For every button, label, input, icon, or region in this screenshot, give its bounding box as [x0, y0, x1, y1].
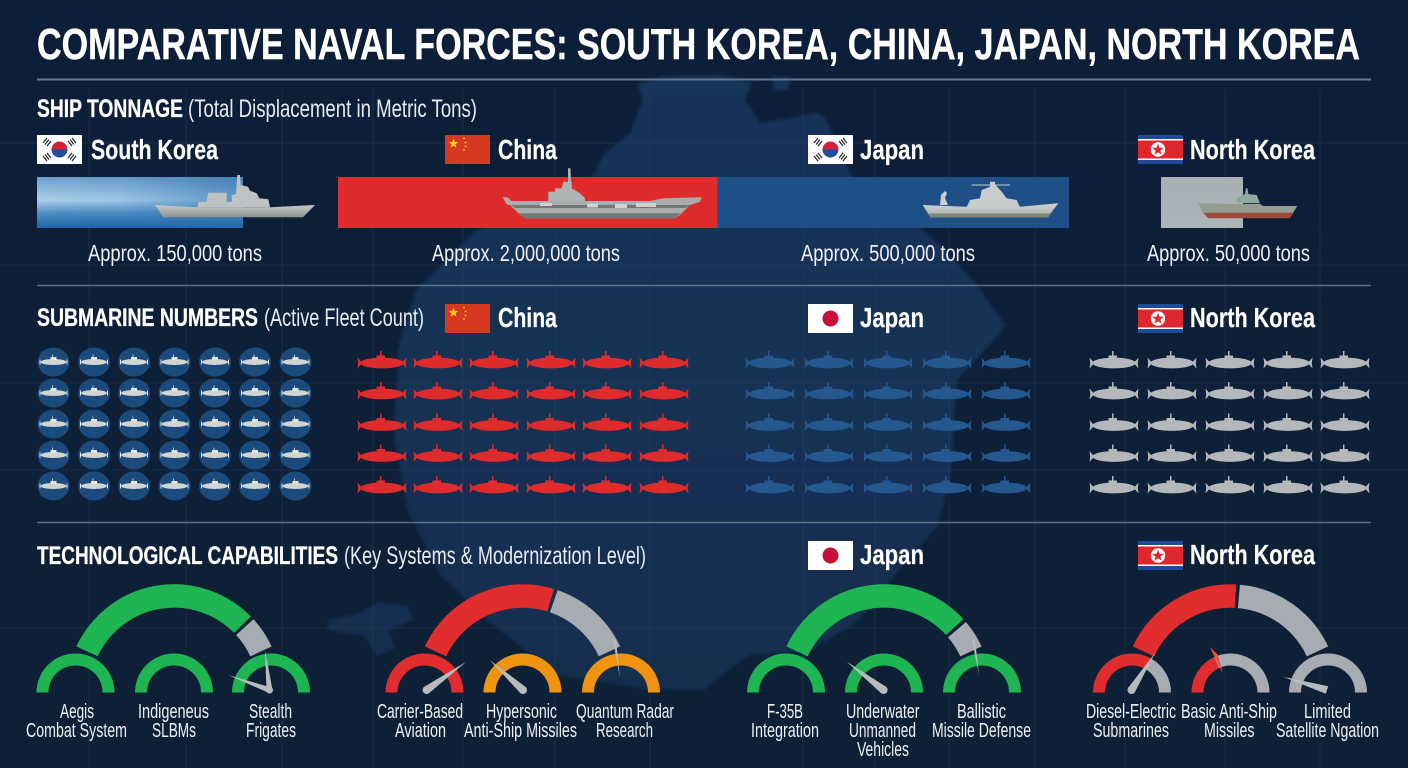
Japan label with flag: Japan: [860, 302, 924, 333]
gauge labels: South Korea: Combat System: [26, 720, 127, 742]
icon: Chinese aircraft carrier: [503, 168, 702, 218]
gauge: stealth frigates: [238, 660, 304, 692]
panel: technological capabilities: [26, 539, 1379, 761]
South Korea tonnage value: Approx. 150,000 tons: [88, 240, 262, 266]
gauge labels: North Korea: Missiles: [1204, 720, 1254, 742]
Japan label with flag: Japan: [860, 134, 924, 165]
gauge: missile defense: [949, 660, 1015, 692]
gauge labels: China: Research: [596, 720, 653, 742]
overall gauge: [797, 596, 971, 651]
Japan label with flag: [808, 134, 924, 165]
North Korea label with flag: [1138, 134, 1315, 165]
gauges: South Korea: [42, 596, 304, 694]
gauge labels: China: Hypersonic: [486, 701, 557, 723]
gauge labels: North Korea: Diesel-Electric: [1086, 701, 1176, 723]
gauge: carrier aviation: [392, 660, 458, 692]
icon: North Korean patrol ship: [1198, 188, 1297, 218]
gauge labels: China: Quantum Radar: [576, 701, 674, 723]
heading: submarine numbers: (Active Fleet Count): [264, 304, 424, 332]
gauge labels: Japan: Integration: [751, 720, 819, 742]
gauge labels: South Korea: Aegis: [60, 701, 94, 723]
South Korea label with flag: [37, 134, 218, 165]
North Korea submarine icons: [1090, 351, 1370, 494]
gauge: basic anti-ship missiles: [1198, 660, 1264, 692]
heading: ship tonnage: (Total Displacement in Metric Tons): [188, 95, 477, 123]
bar: China tonnage: [338, 177, 718, 228]
gauge: hypersonic missiles: [490, 660, 556, 692]
North Korea label with flag: [1138, 302, 1315, 333]
China label with flag: [445, 134, 557, 165]
South Korea submarine icons: [38, 348, 312, 500]
gauge labels: China: [377, 701, 674, 742]
heading: technological capabilities: TECHNOLOGICAL CAPABILITIES: [37, 542, 338, 570]
needles: [847, 640, 979, 694]
Japan submarine icons: [746, 351, 1030, 494]
heading: ship tonnage: [37, 95, 477, 123]
China submarine icons: [358, 351, 688, 494]
China tonnage value: Approx. 2,000,000 tons: [432, 240, 620, 266]
overall gauge: [1144, 596, 1318, 651]
gauge: underwater vehicles: [851, 660, 917, 692]
gauge labels: Japan: [751, 701, 1031, 761]
Japan label with flag: Japan: [860, 539, 924, 570]
gauge labels: North Korea: Submarines: [1093, 720, 1169, 742]
gauge: quantum radar: [588, 660, 654, 692]
North Korea label with flag: North Korea: [1190, 539, 1315, 570]
gauge: limited satellite navigation: [1295, 660, 1361, 692]
overall gauge: [436, 596, 610, 651]
gauge labels: China: Aviation: [395, 720, 446, 742]
gauge labels: China: Anti-Ship Missiles: [464, 720, 577, 742]
gauge labels: North Korea: [1086, 701, 1379, 742]
gauge labels: South Korea: SLBMs: [152, 720, 196, 742]
gauge labels: North Korea: Basic Anti-Ship: [1181, 701, 1277, 723]
gauge labels: Japan: Underwater: [846, 701, 920, 723]
gauge: Aegis: [42, 660, 108, 692]
gauge labels: Japan: F-35B: [767, 701, 803, 723]
Japan label with flag: [808, 539, 924, 570]
panel: submarine numbers: [37, 302, 1370, 500]
gauge labels: South Korea: [26, 701, 296, 742]
needles: [1128, 647, 1328, 694]
panel: ship tonnage: [37, 95, 1315, 266]
gauge labels: South Korea: Frigates: [246, 720, 296, 742]
heading: submarine numbers: SUBMARINE NUMBERS: [37, 304, 258, 332]
South Korea label with flag: South Korea: [91, 134, 218, 165]
gauges: Japan: [753, 596, 1015, 694]
bar: North Korea tonnage: [1161, 177, 1243, 228]
gauge labels: South Korea: Indigeneus: [138, 701, 209, 723]
icon: South Korean destroyer: [155, 175, 315, 217]
gauges: North Korea: [1099, 596, 1361, 694]
China label with flag: [445, 302, 557, 333]
North Korea label with flag: [1138, 539, 1315, 570]
China label with flag: China: [498, 302, 557, 333]
needles: [423, 640, 620, 694]
North Korea label with flag: North Korea: [1190, 134, 1315, 165]
gauge labels: North Korea: Limited: [1304, 701, 1351, 723]
gauge: SLBMs: [141, 660, 207, 692]
gauge labels: Japan: Vehicles: [857, 739, 909, 761]
heading: technological capabilities: [37, 542, 646, 570]
Japan label with flag: [808, 302, 924, 333]
heading: ship tonnage: SHIP TONNAGE: [37, 95, 183, 123]
North Korea label with flag: North Korea: [1190, 302, 1315, 333]
bar: South Korea tonnage: [37, 177, 243, 228]
overall gauge: [87, 596, 261, 651]
gauge labels: Japan: Unmanned: [849, 720, 916, 742]
gauges: China: [392, 596, 654, 694]
North Korea tonnage value: Approx. 50,000 tons: [1147, 240, 1310, 266]
China label with flag: China: [498, 134, 557, 165]
gauge labels: China: Carrier-Based: [377, 701, 463, 723]
gauge: F-35B: [753, 660, 819, 692]
gauge labels: South Korea: Stealth: [249, 701, 292, 723]
bar: Japan tonnage: [718, 177, 1069, 228]
icon: Japanese destroyer: [923, 182, 1058, 218]
background map silhouette: [328, 75, 1005, 690]
Japan tonnage value: Approx. 500,000 tons: [801, 240, 975, 266]
gauge: diesel-electric submarines: [1099, 659, 1165, 692]
gauge labels: Japan: Ballistic: [957, 701, 1006, 723]
heading: technological capabilities: (Key Systems & Modernization Level): [344, 542, 646, 570]
needles: [228, 650, 273, 694]
gauge labels: Japan: Missile Defense: [932, 720, 1031, 742]
